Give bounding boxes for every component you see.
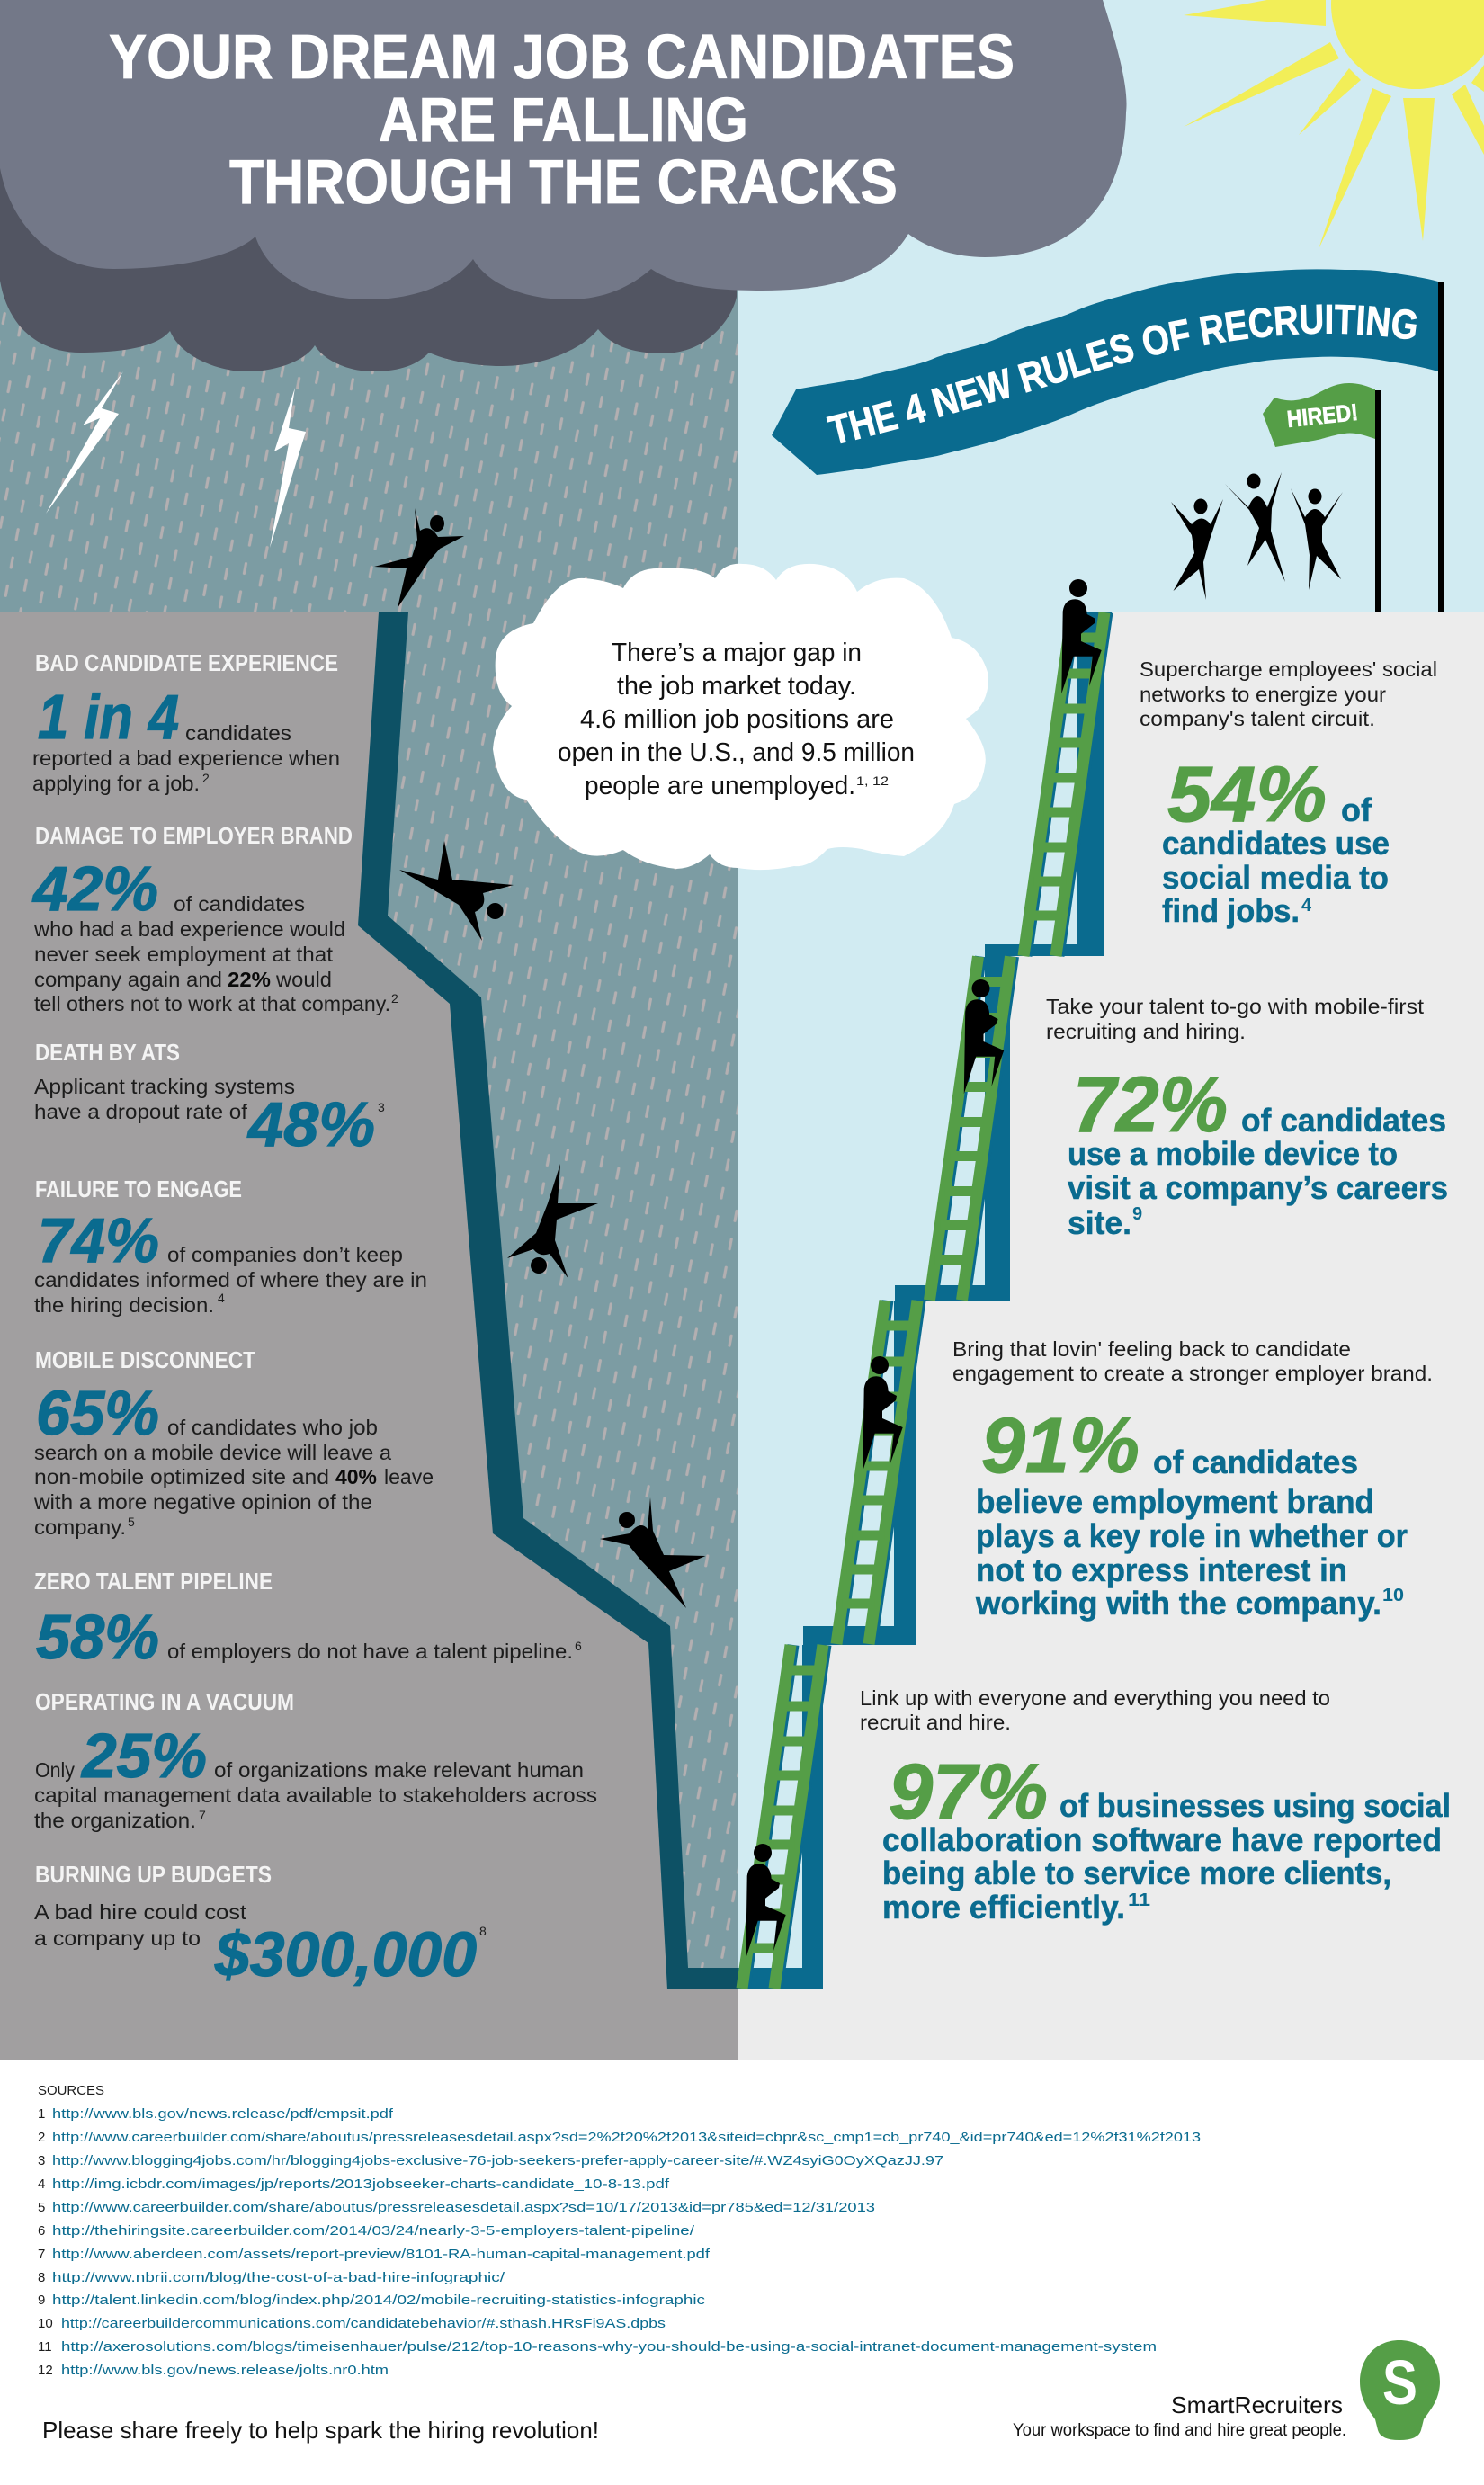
sources list: http://thehiringsite.careerbuilder.com/2014/03/24/nearly-3-5-employers-talent-pipeline/ xyxy=(52,2223,695,2239)
callout: job market gap cloud: people are unemployed. xyxy=(585,772,855,800)
rule 3: employer brand: of candidates xyxy=(1153,1444,1358,1480)
section: burning up budgets: a company up to xyxy=(34,1926,201,1950)
section: death by ats: Applicant tracking systems xyxy=(34,1075,295,1098)
sources list: 4 xyxy=(38,2177,45,2192)
panel: left grey column xyxy=(0,612,738,2060)
rule 2: mobile-first: of candidates xyxy=(1241,1102,1446,1139)
icon: climber 4 xyxy=(746,1844,786,1958)
sources list: 11 xyxy=(38,2339,52,2355)
sources list: http://talent.linkedin.com/blog/index.php/2014/02/mobile-recruiting-statistics-infographic xyxy=(52,2293,706,2308)
rule 3: employer brand: believe employment brand xyxy=(976,1483,1374,1520)
sources list: http://www.bls.gov/news.release/pdf/empsit.pdf xyxy=(52,2106,394,2122)
rule 1: social networks xyxy=(1140,657,1437,929)
section: mobile disconnect: 5 xyxy=(128,1515,135,1529)
section: mobile disconnect: with a more negative opinion of the xyxy=(33,1490,372,1514)
rule 1: social networks: social media to xyxy=(1162,859,1389,896)
section: death by ats: 3 xyxy=(378,1100,385,1114)
sources list: 1 xyxy=(38,2106,45,2122)
company name and tagline xyxy=(1013,2391,1346,2440)
ladder 4 xyxy=(742,1645,826,1989)
ladder 3 xyxy=(836,1301,920,1644)
rule 4: social collaboration: being able to service more clients, xyxy=(882,1855,1391,1891)
panel: sunny sky xyxy=(738,0,1484,2060)
section: death by ats: 48% xyxy=(246,1089,375,1159)
section: death by ats: DEATH BY ATS xyxy=(35,1039,180,1066)
title: ARE FALLING xyxy=(379,85,748,155)
section: burning up budgets: BURNING UP BUDGETS xyxy=(35,1861,272,1888)
section: failure to engage: 74% xyxy=(38,1205,159,1275)
rule 3: employer brand: working with the company. xyxy=(975,1585,1381,1622)
closing message: Please share freely to help spark the hiring revolution! xyxy=(42,2417,599,2444)
rule 1: social networks: of xyxy=(1341,791,1372,828)
rule 4: social collaboration xyxy=(860,1686,1451,1926)
sources list: 12 xyxy=(38,2363,53,2378)
icon: lightning bolt right xyxy=(270,388,306,548)
sources list: 5 xyxy=(38,2200,45,2215)
rule 4: social collaboration: more efficiently. xyxy=(882,1889,1125,1926)
section: operating in a vacuum: 25% xyxy=(80,1721,207,1791)
section: bad candidate experience: 2 xyxy=(202,771,210,785)
rule 3: employer brand: plays a key role in whether or xyxy=(976,1517,1408,1554)
sources list: http://www.nbrii.com/blog/the-cost-of-a-bad-hire-infographic/ xyxy=(52,2270,505,2285)
rule 1: social networks: find jobs. xyxy=(1162,892,1300,929)
sources list: 2 xyxy=(38,2130,45,2145)
title: YOUR DREAM JOB CANDIDATES xyxy=(109,22,1015,92)
icon: falling person 1 xyxy=(374,508,464,608)
section: operating in a vacuum: the organization. xyxy=(34,1809,196,1832)
sources list: 6 xyxy=(38,2223,45,2239)
icon: falling person 3 xyxy=(507,1164,598,1278)
sources list: http://careerbuildercommunications.com/candidatebehavior/#.sthash.HRsFi9AS.dpbs xyxy=(61,2316,666,2331)
section: mobile disconnect: 65% xyxy=(36,1378,159,1448)
banner pole xyxy=(1438,282,1444,612)
section: damage to employer brand: tell others not to work at that company. xyxy=(34,992,390,1015)
section: bad candidate experience xyxy=(32,649,340,795)
sources list: SOURCES xyxy=(38,2083,104,2098)
panel: right grey column xyxy=(738,612,1484,2060)
rule 1: social networks: 54% xyxy=(1167,751,1327,838)
rule 4: social collaboration: recruit and hire. xyxy=(860,1711,1011,1734)
section: death by ats xyxy=(34,1039,385,1159)
section: mobile disconnect: non-mobile optimized site and xyxy=(34,1465,329,1488)
section: bad candidate experience: reported a bad experience when xyxy=(32,746,340,770)
rule 1: social networks: networks to energize your xyxy=(1140,683,1386,706)
sources list xyxy=(38,2083,1201,2378)
section: mobile disconnect: MOBILE DISCONNECT xyxy=(35,1346,255,1373)
banner: the 4 new rules of recruiting: THE 4 NEW RULES OF RECRUITING xyxy=(826,304,1417,444)
rule 4: social collaboration: 11 xyxy=(1128,1891,1150,1910)
section: zero talent pipeline: ZERO TALENT PIPELINE xyxy=(34,1568,273,1595)
storm cloud front xyxy=(0,0,1127,299)
rule 3: employer brand: not to express interest in xyxy=(976,1551,1347,1588)
section: bad candidate experience: candidates xyxy=(185,721,291,745)
icon: climber 3 xyxy=(863,1356,903,1470)
section: bad candidate experience: applying for a job. xyxy=(32,772,200,795)
section: mobile disconnect: leave xyxy=(384,1465,434,1488)
section: burning up budgets: A bad hire could cost xyxy=(34,1900,247,1924)
sources list: 9 xyxy=(38,2293,45,2308)
callout: job market gap cloud: 1, 12 xyxy=(856,773,889,788)
callout: job market gap cloud: the job market today. xyxy=(617,672,856,701)
section: damage to employer brand: of candidates xyxy=(174,892,305,916)
crack outline xyxy=(358,612,738,1989)
section: burning up budgets xyxy=(34,1861,487,1989)
hired pole xyxy=(1375,390,1381,612)
panel: rainy background xyxy=(0,0,738,2060)
section: burning up budgets: $300,000 xyxy=(214,1919,477,1989)
rule 2: mobile-first xyxy=(1046,995,1448,1241)
icon: climber 1 xyxy=(1061,579,1102,693)
storm cloud back xyxy=(0,153,737,371)
rule 2: mobile-first: 72% xyxy=(1073,1061,1228,1149)
section: mobile disconnect: 40% xyxy=(335,1465,377,1488)
section: damage to employer brand: 2 xyxy=(391,991,398,1006)
icon: falling person 4 xyxy=(600,1497,705,1608)
rule 2: mobile-first: visit a company’s careers xyxy=(1068,1169,1448,1206)
rule 2: mobile-first: recruiting and hiring. xyxy=(1046,1020,1246,1043)
section: zero talent pipeline xyxy=(34,1568,582,1672)
icon: falling person 2 xyxy=(399,841,514,941)
icon: hired jumpers xyxy=(1171,472,1343,600)
ladder 2 xyxy=(930,957,1013,1301)
sources list: http://img.icbdr.com/images/jp/reports/2013jobseeker-charts-candidate_10-8-13.pdf xyxy=(52,2177,670,2192)
rule 3: employer brand: 10 xyxy=(1382,1586,1404,1605)
icon: SmartRecruiters bulb logo xyxy=(1360,2340,1440,2440)
sources list: http://axerosolutions.com/blogs/timeisenhauer/pulse/212/top-10-reasons-why-you-should-be-using-a-social-intranet-document-management-system xyxy=(61,2339,1157,2355)
section: damage to employer brand: never seek employment at that xyxy=(34,943,334,966)
rule 2: mobile-first: use a mobile device to xyxy=(1068,1135,1398,1172)
banner: the 4 new rules of recruiting xyxy=(772,269,1438,475)
company name and tagline: Your workspace to find and hire great people. xyxy=(1013,2421,1346,2440)
section: failure to engage: candidates informed of where they are in xyxy=(34,1268,427,1292)
title: THROUGH THE CRACKS xyxy=(229,147,898,217)
section: zero talent pipeline: 6 xyxy=(575,1639,582,1653)
section: damage to employer brand: who had a bad experience would xyxy=(33,917,345,941)
section: bad candidate experience: 1 in 4 xyxy=(38,682,179,752)
section: failure to engage: the hiring decision. xyxy=(34,1293,214,1317)
flag: hired: HIRED! xyxy=(1285,398,1359,433)
section: damage to employer brand: would xyxy=(275,968,332,991)
sources list: 10 xyxy=(38,2316,53,2331)
section: zero talent pipeline: 58% xyxy=(36,1602,159,1672)
section: damage to employer brand: 42% xyxy=(31,854,158,924)
section: damage to employer brand: DAMAGE TO EMPLOYER BRAND xyxy=(35,822,353,849)
section: operating in a vacuum: 7 xyxy=(199,1808,206,1822)
callout: job market gap cloud: open in the U.S., and 9.5 million xyxy=(558,738,915,767)
rule 4: social collaboration: of businesses using social xyxy=(1059,1787,1451,1824)
ladder 1 xyxy=(1024,612,1107,956)
callout: job market gap cloud: 4.6 million job positions are xyxy=(580,705,894,734)
section: death by ats: have a dropout rate of xyxy=(34,1100,248,1123)
section: operating in a vacuum: Only xyxy=(35,1758,75,1782)
rule 3: employer brand xyxy=(952,1337,1433,1622)
sources list: http://www.bls.gov/news.release/jolts.nr0.htm xyxy=(61,2363,389,2378)
flag: hired xyxy=(1263,383,1375,447)
section: failure to engage: of companies don’t keep xyxy=(167,1243,403,1266)
sources list: http://www.careerbuilder.com/share/aboutus/pressreleasesdetail.aspx?sd=10/17/2013&id=pr785&ed=12/31/2013 xyxy=(52,2200,875,2215)
section: damage to employer brand xyxy=(31,822,398,1015)
rule 1: social networks: 4 xyxy=(1301,896,1312,916)
sources list: 8 xyxy=(38,2270,45,2285)
callout: job market gap cloud: There’s a major gap in xyxy=(612,639,862,667)
company name and tagline: SmartRecruiters xyxy=(1171,2391,1343,2418)
sources list: http://www.aberdeen.com/assets/report-preview/8101-RA-human-capital-management.pdf xyxy=(52,2247,711,2262)
icon: sun xyxy=(1184,0,1484,249)
rule 2: mobile-first: site. xyxy=(1068,1204,1131,1241)
section: damage to employer brand: company again and xyxy=(34,968,222,991)
title xyxy=(109,22,1015,217)
section: operating in a vacuum: OPERATING IN A VACUUM xyxy=(35,1688,294,1715)
staircase walls xyxy=(738,612,1112,1989)
sources list: http://www.careerbuilder.com/share/aboutus/pressreleasesdetail.aspx?sd=2%2f20%2f2013&siteid=cbpr&sc_cmp1=cb_pr740_&id=pr740&ed=12%2f31%2f2013 xyxy=(52,2130,1201,2145)
section: damage to employer brand: 22% xyxy=(228,968,271,991)
rule 4: social collaboration: 97% xyxy=(889,1748,1048,1836)
sources list: 3 xyxy=(38,2153,45,2168)
icon: climber 2 xyxy=(964,979,1004,1094)
section: zero talent pipeline: of employers do not have a talent pipeline. xyxy=(167,1640,573,1663)
rule 3: employer brand: engagement to create a stronger employer brand. xyxy=(952,1362,1433,1385)
rule 2: mobile-first: Take your talent to-go with mobile-first xyxy=(1046,995,1425,1018)
section: failure to engage: 4 xyxy=(218,1291,225,1305)
section: failure to engage xyxy=(34,1175,427,1317)
rule 1: social networks: company's talent circuit. xyxy=(1140,707,1375,730)
section: mobile disconnect: of candidates who job xyxy=(167,1416,378,1439)
icon: lightning bolt left xyxy=(46,371,123,514)
section: failure to engage: FAILURE TO ENGAGE xyxy=(35,1175,242,1202)
rule 1: social networks: Supercharge employees' social xyxy=(1140,657,1437,681)
section: mobile disconnect xyxy=(33,1346,434,1539)
section: mobile disconnect: search on a mobile device will leave a xyxy=(34,1441,391,1464)
rule 3: employer brand: Bring that lovin' feeling back to candidate xyxy=(952,1337,1351,1361)
section: burning up budgets: 8 xyxy=(479,1924,487,1938)
section: bad candidate experience: BAD CANDIDATE EXPERIENCE xyxy=(35,649,338,676)
rule 2: mobile-first: 9 xyxy=(1132,1204,1142,1224)
section: mobile disconnect: company. xyxy=(34,1515,126,1539)
section: operating in a vacuum: capital management data available to stakeholders across xyxy=(34,1783,597,1807)
callout: job market gap cloud xyxy=(493,564,988,870)
rule 4: social collaboration: Link up with everyone and everything you need to xyxy=(860,1686,1330,1710)
sources list: http://www.blogging4jobs.com/hr/blogging4jobs-exclusive-76-job-seekers-prefer-apply-career-site/#.WZ4syiG0OyXQazJJ.97 xyxy=(52,2153,943,2168)
section: operating in a vacuum xyxy=(34,1688,597,1832)
icon: SmartRecruiters bulb logo: S xyxy=(1382,2347,1417,2418)
section: operating in a vacuum: of organizations make relevant human xyxy=(214,1758,584,1782)
sources list: 7 xyxy=(38,2247,45,2262)
rule 4: social collaboration: collaboration software have reported xyxy=(882,1821,1442,1858)
rule 1: social networks: candidates use xyxy=(1162,825,1390,862)
rule 3: employer brand: 91% xyxy=(981,1402,1140,1489)
